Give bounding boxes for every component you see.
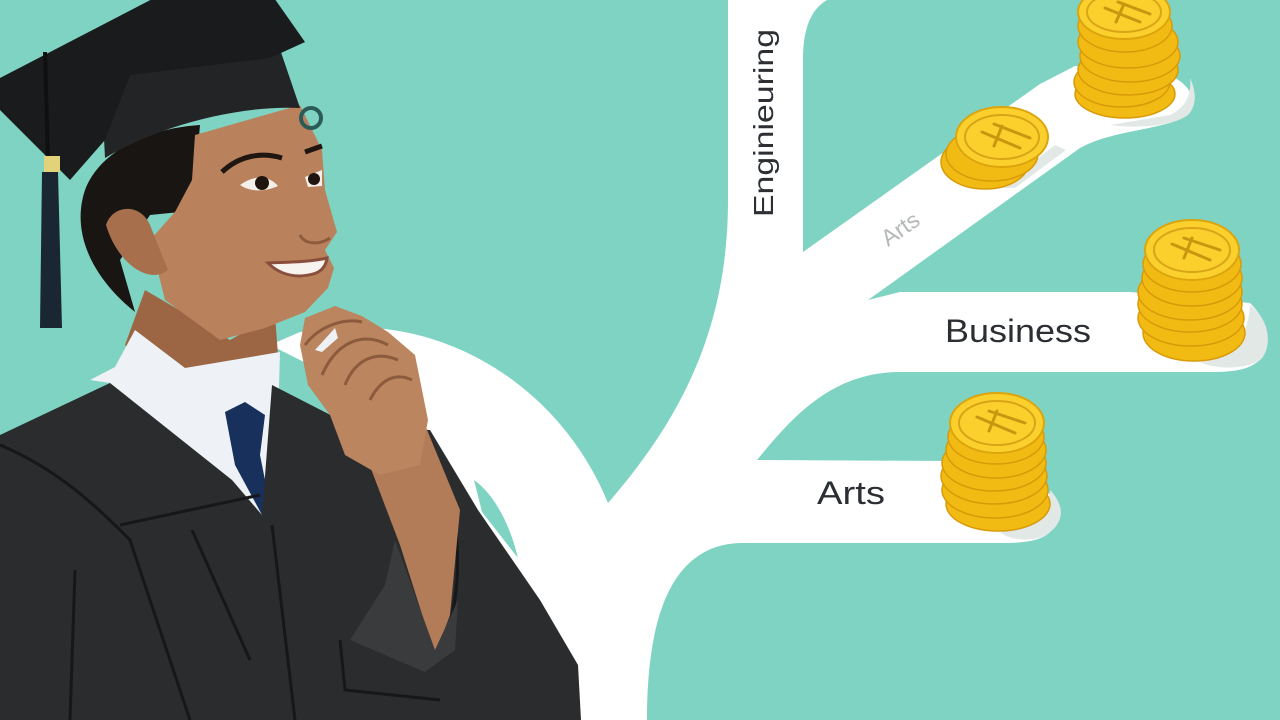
branching white path diagram [270,0,1268,720]
hair back [81,125,200,312]
cap board [0,0,305,180]
tie [225,402,274,525]
neck [125,290,278,385]
coin stack: fourth [941,393,1050,531]
coin stack: top right [1074,0,1180,118]
label: Business: Business [945,313,1091,349]
paper slip in fingers [315,328,338,352]
graduate figure [0,0,581,720]
coin shadow: second stack [1000,145,1066,188]
label: Arts: Arts [817,475,885,511]
nose shadow [300,235,330,243]
tassel [40,172,62,328]
coin stack: second [941,107,1048,189]
label: Arts small: Arts [876,206,924,251]
smile [268,258,327,276]
hand [300,306,428,475]
face [150,105,337,340]
gown [0,383,581,720]
shirt collar [90,330,280,520]
eyebrows and eyes [222,146,322,172]
gown fold shadows [0,445,457,720]
cap skull [100,20,300,158]
hair curl at temple [301,108,321,128]
coin shadow: third stack [1200,305,1268,368]
coin stack: third [1138,220,1245,361]
ear [106,209,168,275]
tassel cord [45,52,48,160]
forearm [360,425,460,655]
sleeve cuff [350,540,458,672]
teal sliver behind gown [474,480,518,558]
label: Engineering: Enginieuring [748,29,779,217]
tassel bands [44,156,60,172]
coin shadow: top stack [1110,78,1195,127]
coin shadow: fourth stack [1000,490,1061,540]
